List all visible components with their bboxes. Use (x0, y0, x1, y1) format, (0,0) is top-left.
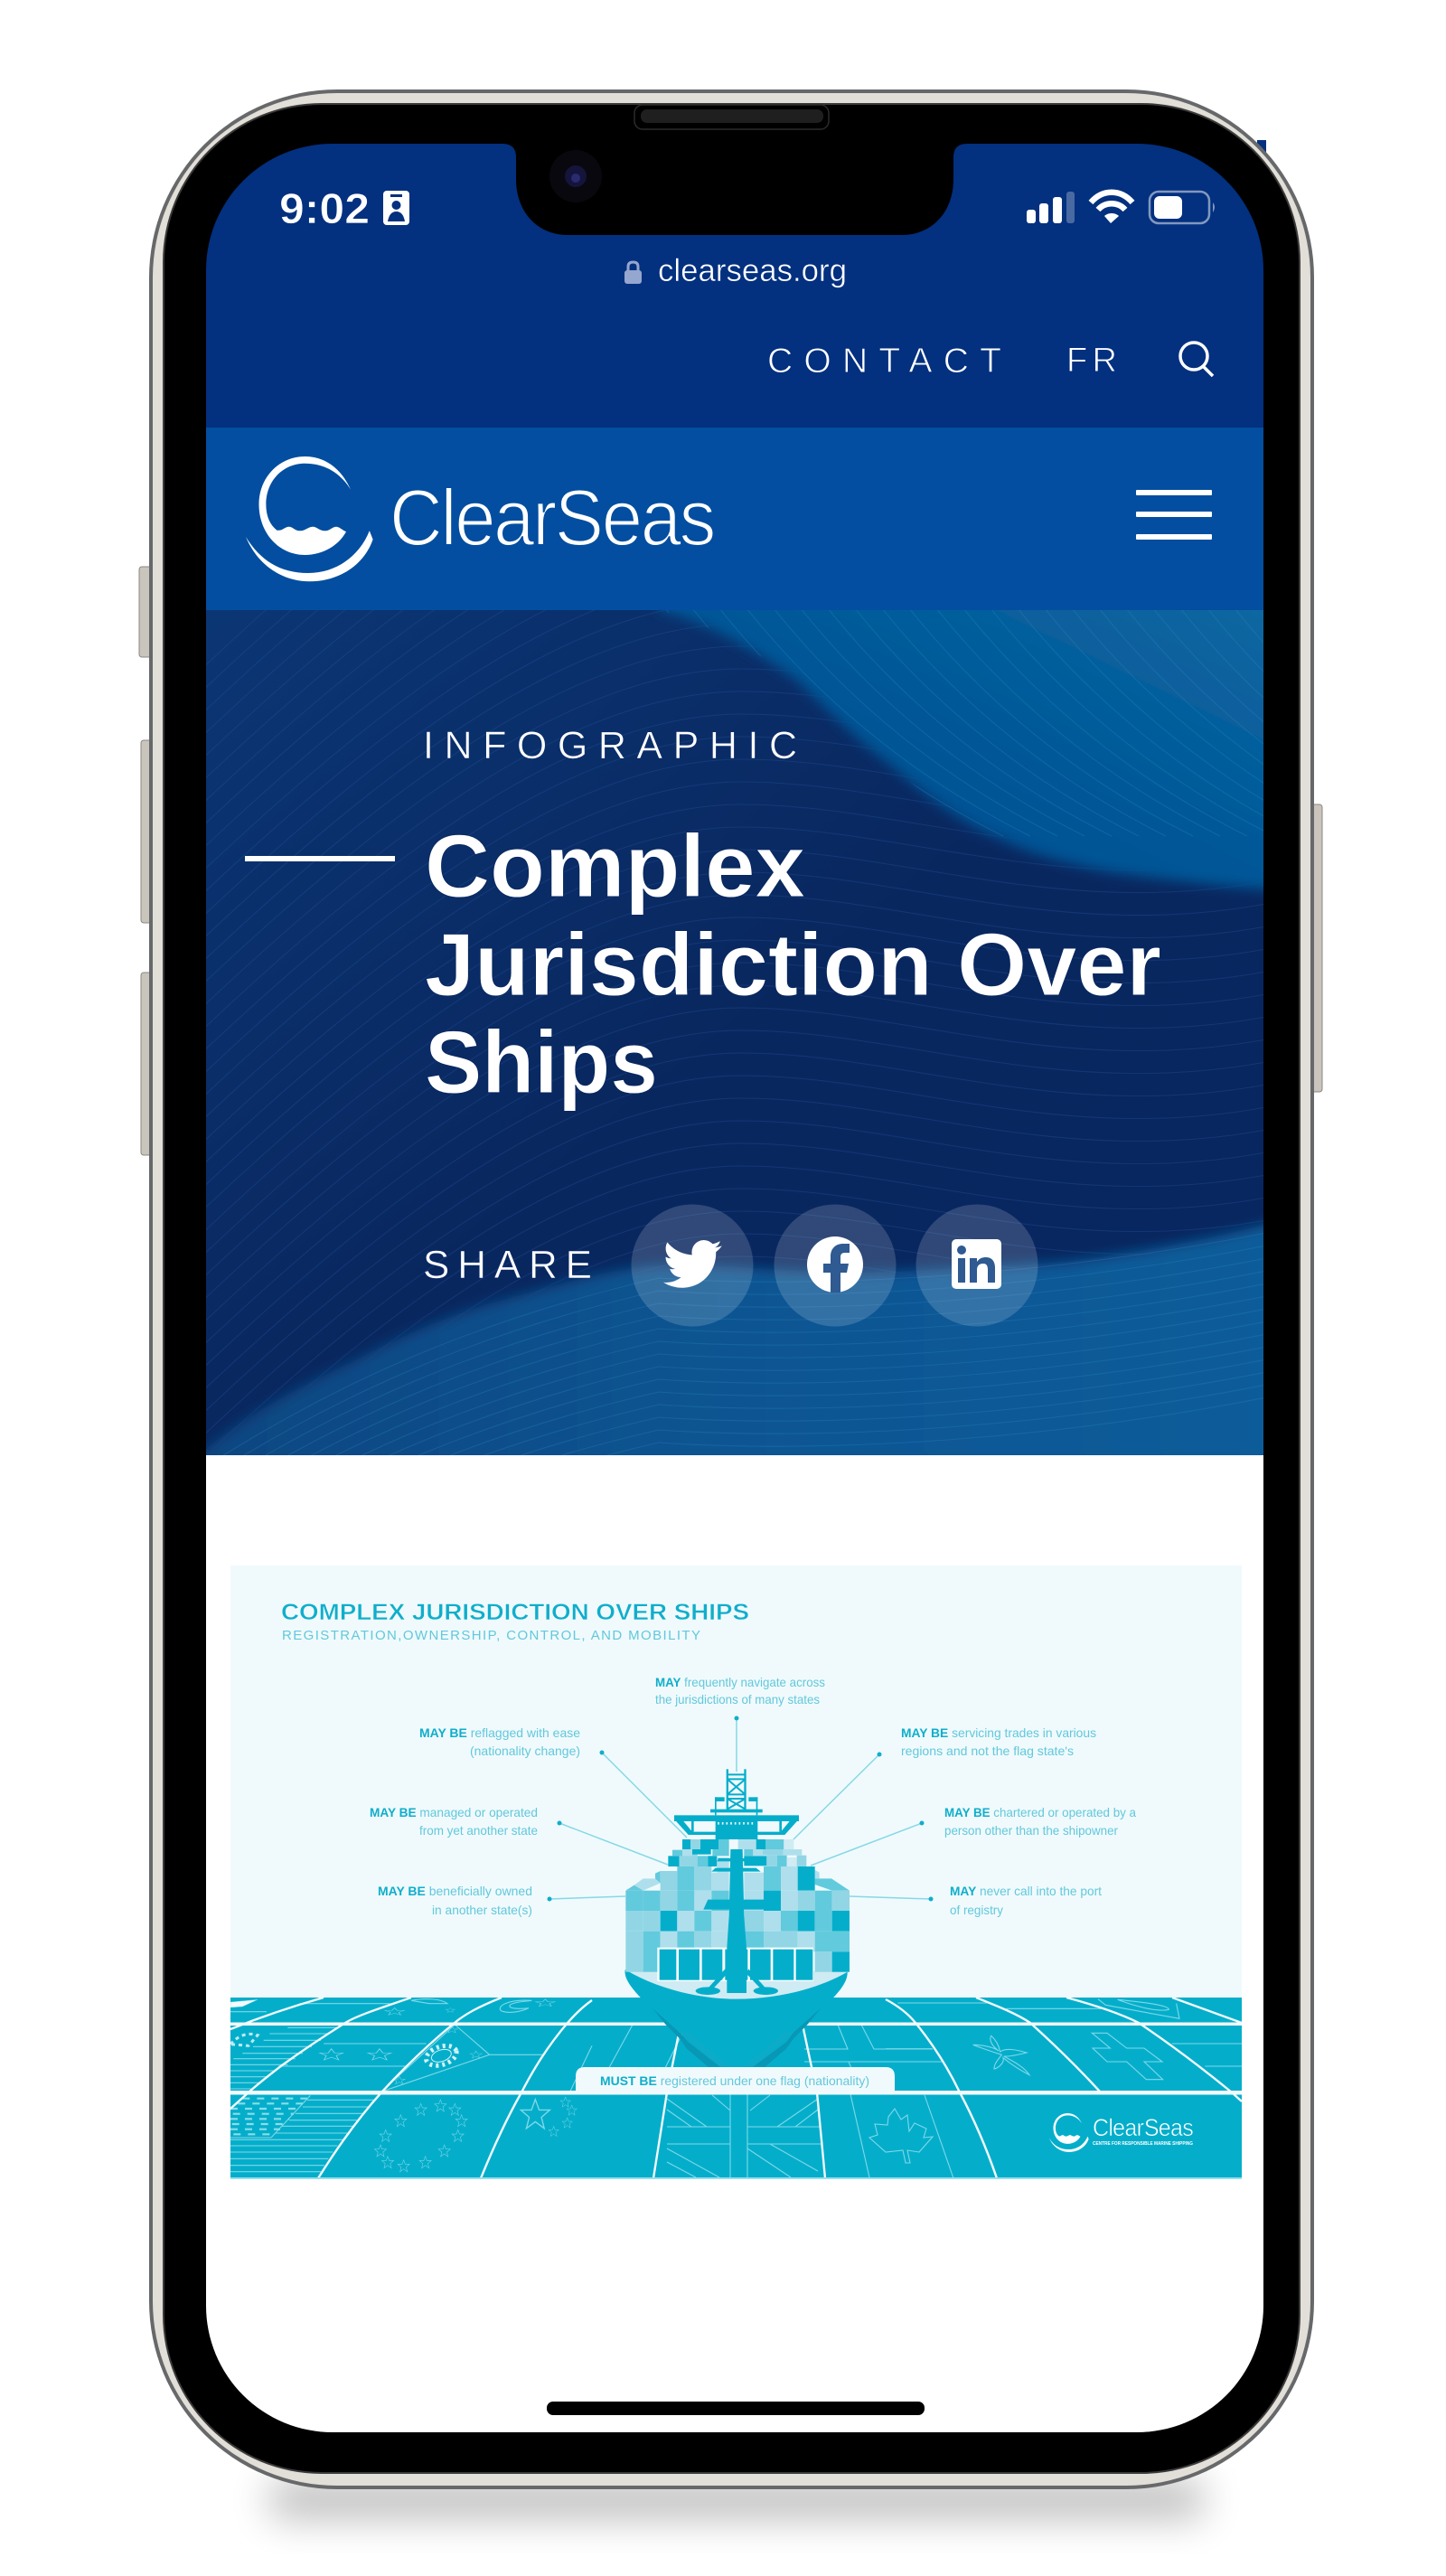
status bar time: 9:02 (279, 184, 370, 232)
callout: navigate: the jurisdictions of many states (655, 1692, 820, 1706)
top nav: language: FR (1066, 342, 1117, 380)
callout: chartered (944, 1805, 1136, 1838)
hero eyebrow: INFOGRAPHIC (423, 724, 797, 767)
callout: beneficially owned: MAY BE beneficially owned (378, 1884, 532, 1898)
small clear seas logo: CENTRE FOR RESPONSIBLE MARINE SHIPPING (1093, 2141, 1193, 2147)
hull (625, 1970, 848, 2067)
icon: hamburger menu (1136, 490, 1212, 540)
phone body (149, 89, 1314, 2489)
screen (206, 144, 1263, 2432)
callout: beneficially owned (378, 1884, 532, 1917)
infographic title: COMPLEX JURISDICTION OVER SHIPS (281, 1600, 749, 1625)
callout: reflagged: (nationality change) (470, 1744, 580, 1758)
containers (625, 1839, 850, 1972)
callout: servicing trades: MAY BE servicing trades in various (901, 1725, 1096, 1740)
callout leader lines (548, 1716, 933, 1902)
callout: managed: from yet another state (419, 1823, 538, 1838)
white page area (206, 1455, 1263, 2436)
hero title (425, 816, 1161, 1112)
callout: chartered: person other than the shipowner (944, 1823, 1118, 1838)
icon: search (1180, 343, 1213, 376)
share button: linkedin (916, 1204, 1038, 1327)
share button: twitter (631, 1204, 754, 1327)
container ship (625, 1769, 850, 2067)
flags centre: union jack and cross (596, 2025, 953, 2178)
callout: managed: MAY BE managed or operated (370, 1805, 538, 1819)
small clear seas logo (1049, 2113, 1193, 2152)
phone shadow (271, 2481, 1202, 2517)
callout: navigate: MAY frequently navigate across (655, 1675, 825, 1689)
top nav: contact: CONTACT (767, 342, 1001, 381)
callout: beneficially owned: in another state(s) (432, 1903, 532, 1917)
logo navigation band (206, 428, 1263, 610)
icon: id badge (383, 191, 409, 225)
top browser header band (206, 144, 1263, 428)
callout: navigate (655, 1675, 825, 1706)
share button: facebook (774, 1204, 897, 1327)
infographic subtitle: REGISTRATION,OWNERSHIP, CONTROL, AND MOBILITY (282, 1628, 700, 1643)
phone mockup infographic (139, 89, 1323, 2540)
hero title: Jurisdiction Over (425, 915, 1161, 1014)
hero background with waves (206, 610, 1263, 1455)
major grid lines (230, 1998, 1242, 2178)
callout: port of registry: MAY never call into the port (950, 1884, 1102, 1898)
share label: SHARE (423, 1243, 592, 1287)
clear seas logo (246, 456, 714, 581)
hero title: Ships (425, 1012, 658, 1112)
flags right (886, 1999, 1242, 2080)
panel: embedded infographic (230, 1565, 1242, 2179)
callout: chartered: MAY BE chartered or operated by a (944, 1805, 1136, 1819)
bridge and mast tower (674, 1769, 799, 1839)
sea of flags (230, 1998, 1242, 2179)
icon: wifi (1091, 193, 1132, 223)
hero title: Complex (425, 816, 805, 916)
notch (502, 105, 967, 235)
url text: clearseas.org (658, 253, 847, 288)
home indicator (547, 2402, 925, 2415)
callout: port of registry: of registry (950, 1903, 1003, 1917)
logo mark (246, 456, 373, 581)
deck crane and mast (696, 1849, 778, 1995)
must be label (576, 2067, 895, 2092)
logo wordmark: Clear Seas (390, 473, 714, 562)
camera (549, 150, 602, 202)
side buttons (139, 567, 1322, 1155)
icon: lock (624, 262, 642, 284)
speaker (634, 105, 829, 129)
icon: signal bars (1027, 192, 1075, 223)
callout: reflagged (419, 1725, 580, 1758)
callout: servicing trades (901, 1725, 1096, 1758)
small clear seas logo: Clear Seas (1093, 2114, 1193, 2141)
callout: port of registry (950, 1884, 1102, 1917)
icon: battery (1150, 192, 1215, 223)
hero rule (245, 856, 395, 861)
must be label: MUST BE registered under one flag (nationality) (600, 2073, 869, 2088)
flags left (230, 1999, 592, 2172)
front window containers (657, 1948, 813, 1981)
callout: reflagged: MAY BE reflagged with ease (419, 1725, 580, 1740)
callout: servicing trades: regions and not the flag state's (901, 1744, 1074, 1758)
callout: managed (370, 1805, 538, 1838)
